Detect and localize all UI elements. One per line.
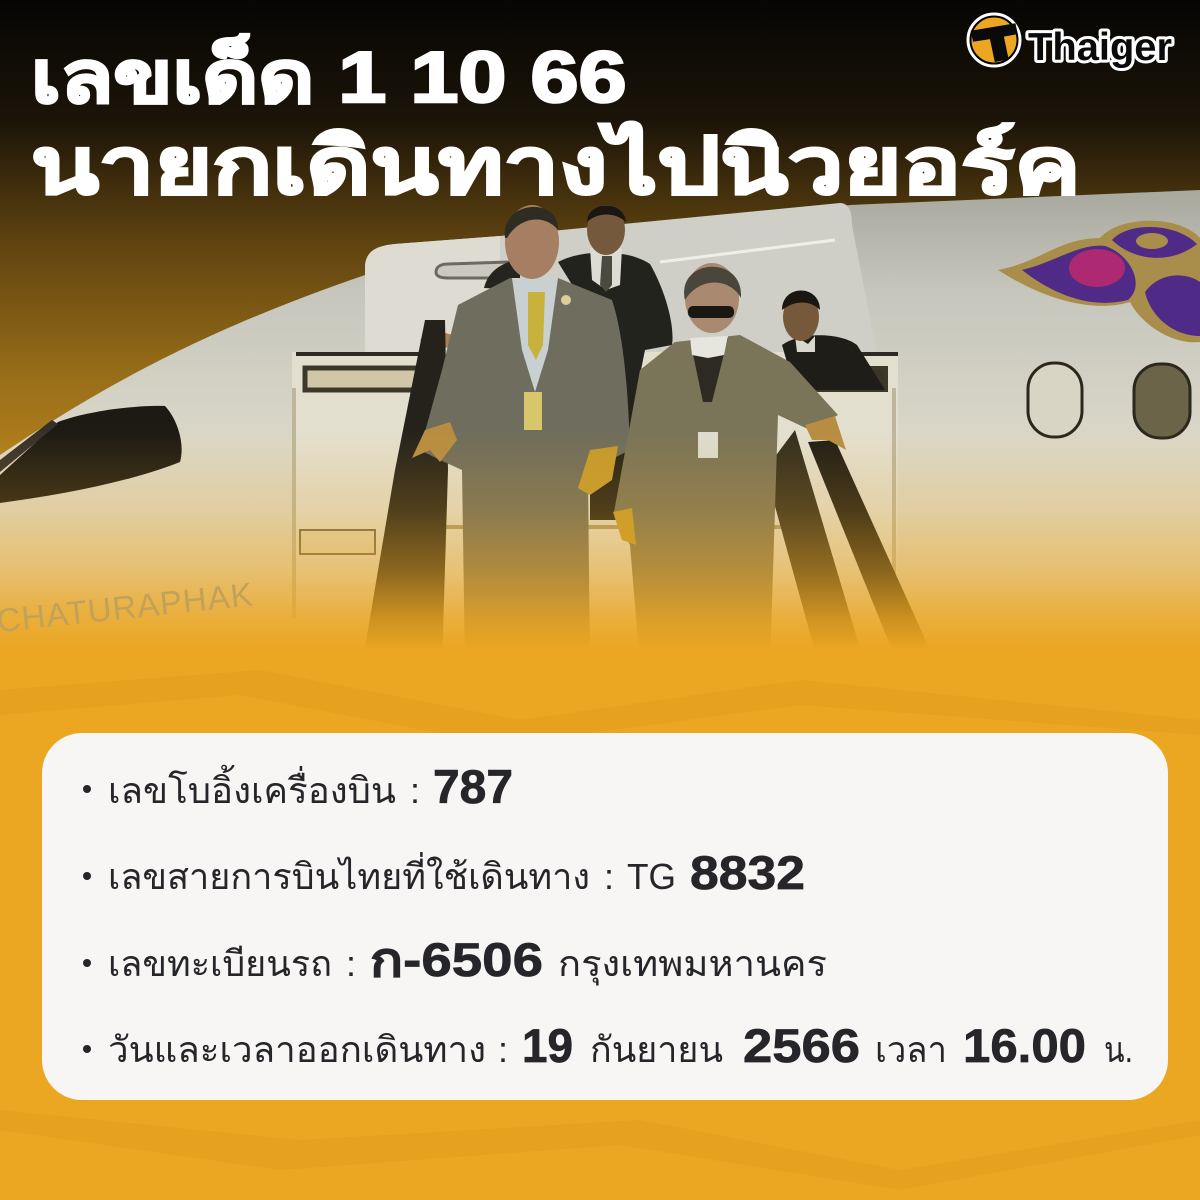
paper texture shading: [0, 670, 1200, 1190]
door frame: [365, 203, 880, 370]
man one: prime minister: [412, 205, 630, 665]
fact: car registration: :: [346, 943, 356, 984]
fact: departure date and time: :: [498, 1029, 508, 1070]
fact: flight number: TG: [627, 856, 676, 897]
registration name on fuselage: CHATURAPHAK: [0, 575, 255, 639]
stairs platform: [292, 352, 898, 618]
panel: flight facts: [42, 733, 1168, 1100]
fact: departure date and time: น.: [1104, 1029, 1133, 1070]
fact: flight number: เลขสายการบินไทยที่ใช้เดินทาง: [108, 852, 590, 897]
fact: departure date and time: 19: [522, 1019, 573, 1072]
icon: T badge: [968, 14, 1020, 66]
airline tail logo: [998, 221, 1200, 342]
fact: boeing number: [83, 760, 513, 813]
fact: flight number: [83, 846, 805, 899]
fact: flight number: :: [604, 856, 614, 897]
orange fade over photo: [0, 430, 1200, 1200]
title line two: นายกเดินทางไปนิวยอร์ค: [31, 122, 1081, 210]
title line one: เลขเด็ด 1 10 66: [31, 38, 627, 118]
background people: [420, 205, 885, 400]
fact: departure date and time: วันและเวลาออกเดินทาง: [108, 1029, 486, 1070]
fact: departure date and time: [83, 1019, 1133, 1072]
fact: boeing number: เลขโบอิ้งเครื่องบิน: [108, 764, 396, 811]
fact: departure date and time: 2566: [743, 1019, 860, 1072]
fact: flight number: 8832: [690, 846, 805, 899]
left handrail: [362, 320, 448, 665]
plane fuselage: [0, 190, 1200, 700]
cockpit window: [0, 406, 182, 503]
right handrail: [808, 440, 930, 650]
fact: car registration: [83, 933, 827, 986]
title: [31, 32, 1081, 210]
fact: car registration: กรุงเทพมหานคร: [558, 943, 827, 986]
man two: official with lanyard: [613, 263, 846, 665]
passenger windows: [1028, 363, 1082, 437]
brand name: Thaiger: [1028, 26, 1172, 69]
fact: departure date and time: กันยายน: [590, 1029, 723, 1070]
fact: boeing number: :: [410, 770, 420, 811]
fact: car registration: เลขทะเบียนรถ: [108, 943, 332, 984]
logo: Thaiger: [966, 12, 1174, 71]
fact: boeing number: 787: [433, 760, 513, 813]
fact: departure date and time: 16.00: [963, 1019, 1086, 1072]
fact: departure date and time: เวลา: [875, 1029, 947, 1070]
fact: car registration: ก-6506: [370, 933, 543, 986]
